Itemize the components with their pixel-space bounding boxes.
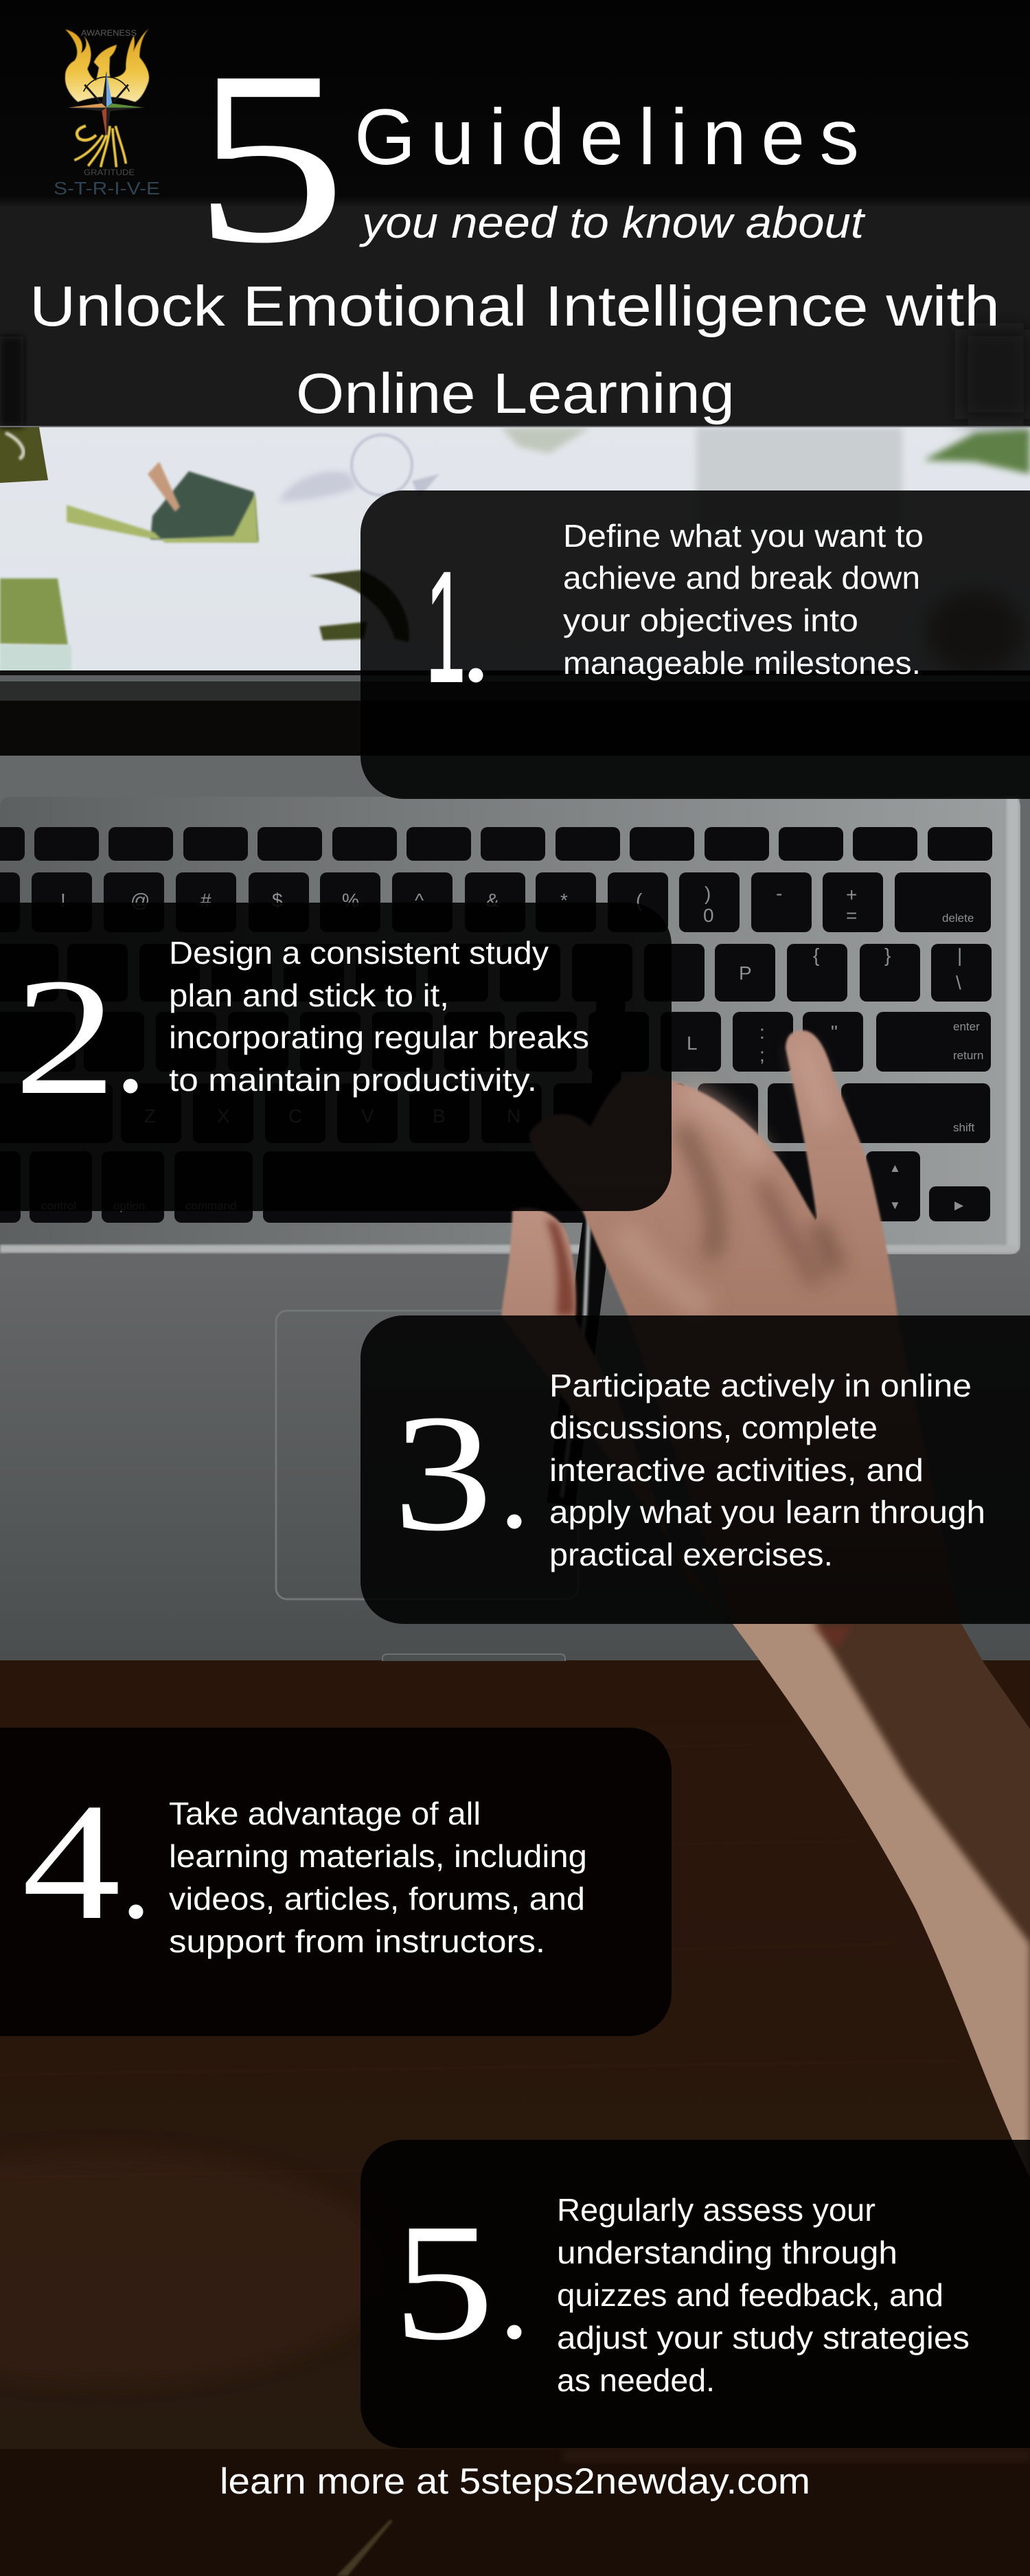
forearm: [721, 1614, 1030, 2184]
pen: [561, 997, 611, 1504]
text: step 1: achieve and break down: [563, 560, 920, 596]
keyboard legends: command: [185, 1199, 237, 1212]
text: step 5: [557, 2192, 970, 2398]
text: step 5: quizzes and feedback, and: [557, 2277, 943, 2313]
keyboard legends: !: [60, 890, 66, 911]
text: step 2: incorporating regular breaks: [169, 1019, 589, 1055]
icon: STRIVE phoenix logo: GRATITUDE: [84, 168, 135, 177]
keyboard legends: return: [953, 1049, 983, 1062]
keyboard legends: B: [433, 1105, 446, 1127]
text: step 3: practical exercises.: [549, 1537, 833, 1572]
number 5: 5: [393, 2189, 494, 2375]
panel: step 3: [360, 1315, 1030, 1624]
keyboard legends: X: [217, 1105, 230, 1127]
panel: step 4: [0, 1728, 672, 2036]
text: step 3: apply what you learn through: [549, 1494, 985, 1530]
keyboard legends: %: [342, 890, 359, 911]
text: step 3: [549, 1368, 985, 1572]
keyboard legends: ^: [415, 890, 424, 911]
number 4: [22, 1769, 143, 1954]
keyboard legends: {: [813, 945, 819, 966]
text: step 4: Take advantage of all: [169, 1796, 481, 1831]
text: step 5: as needed.: [557, 2362, 715, 2398]
phoenix tail: [74, 126, 126, 167]
text: step 2: plan and stick to it,: [169, 978, 449, 1013]
hand and fingers: [501, 1030, 961, 1624]
heading: Unlock Emotional Intelligence with: [30, 274, 1000, 338]
keyboard legends: ▶: [954, 1199, 964, 1212]
number 3: 3: [393, 1380, 493, 1566]
keyboard legends: L: [687, 1032, 698, 1054]
dial: [84, 77, 129, 91]
text: step 1: manageable milestones.: [563, 645, 921, 681]
number 2: [14, 944, 137, 1129]
text: step 5: Regularly assess your: [557, 2192, 876, 2228]
keyboard legends: ▼: [889, 1199, 901, 1212]
title: big numeral 5: 5: [193, 20, 347, 294]
laptop bezel and hinge: [0, 670, 1030, 826]
compass star: [67, 71, 146, 142]
number 1: 1: [426, 539, 466, 715]
keyboard legends: P: [739, 962, 752, 984]
keyboard legends: =: [846, 905, 857, 926]
panel: step 2: [0, 903, 672, 1211]
keyboard legends: option: [113, 1199, 145, 1212]
finger shading: [680, 1127, 838, 1285]
text: step 1: [563, 518, 924, 681]
text: step 5: adjust your study strategies: [557, 2320, 970, 2355]
keyboard legends: delete: [942, 912, 974, 925]
laptop keyboard deck: [0, 756, 1030, 1661]
keyboard legends: -: [776, 883, 782, 904]
header band: [0, 0, 1030, 427]
number 1: [426, 539, 483, 715]
panel: step 1: [360, 490, 1030, 799]
keyboard legends: shift: [953, 1121, 974, 1134]
text: step 3: discussions, complete: [549, 1410, 878, 1445]
desk surface: [0, 1654, 1030, 2576]
keyboard legends: ): [705, 883, 711, 904]
keyboard legends: (: [636, 890, 643, 911]
text: step 1: Define what you want to: [563, 518, 924, 554]
keyboard legends: 0: [703, 905, 714, 926]
number 2: 2: [14, 944, 117, 1129]
text: step 4: videos, articles, forums, and: [169, 1881, 585, 1917]
text: step 4: support from instructors.: [169, 1923, 545, 1959]
keyboard legends: ▲: [889, 1162, 901, 1175]
keyboard legends: |: [957, 945, 962, 966]
keyboard legends: ;: [759, 1044, 765, 1065]
text: step 4: learning materials, including: [169, 1838, 587, 1874]
keyboard legends: V: [361, 1105, 374, 1127]
keyboard legends: +: [846, 884, 857, 905]
icon: STRIVE phoenix logo: [54, 28, 160, 199]
laptop screen: [0, 412, 1030, 673]
keyboard legends: control: [41, 1199, 76, 1212]
text: step 3: interactive activities, and: [549, 1452, 924, 1488]
trackpad: [276, 1311, 578, 1599]
text: step 1: your objectives into: [563, 602, 858, 638]
keyboard legends: N: [507, 1105, 520, 1127]
keyboard keys: [0, 827, 992, 1223]
number 4: 4: [22, 1769, 121, 1954]
keyboard legends: :: [759, 1021, 765, 1043]
heading: [30, 274, 1000, 425]
keyboard legends: C: [288, 1105, 302, 1127]
keyboard legends: #: [201, 890, 211, 911]
heading: Online Learning: [296, 361, 735, 425]
text: step 2: Design a consistent study: [169, 935, 549, 971]
keyboard legends: }: [884, 945, 891, 966]
text: step 5: understanding through: [557, 2235, 897, 2270]
phoenix flames: [65, 29, 149, 102]
icon: STRIVE phoenix logo: AWARENESS: [81, 28, 137, 38]
keyboard legends: [41, 883, 983, 1212]
text: step 3: Participate actively in online: [549, 1368, 972, 1403]
keyboard legends: Z: [144, 1105, 156, 1127]
number 5: [393, 2189, 522, 2375]
text: step 2: [169, 935, 589, 1098]
keyboard legends: enter: [953, 1020, 980, 1033]
number 3: [393, 1380, 522, 1566]
keyboard legends: ": [831, 1021, 838, 1043]
keyboard legends: \: [956, 972, 961, 993]
keyboard legends: &: [486, 890, 499, 911]
panel: step 5: [360, 2140, 1030, 2448]
keyboard legends: *: [560, 890, 568, 911]
keyboard legends: $: [272, 890, 283, 911]
text: step 2: to maintain productivity.: [169, 1062, 537, 1098]
icon: STRIVE phoenix logo: S-T-R-I-V-E: [54, 178, 160, 199]
title: Guidelines: Guidelines: [354, 93, 859, 181]
footer: website link text: learn more at 5steps2newday.com: [220, 2461, 810, 2502]
keyboard legends: @: [130, 890, 150, 911]
subtitle: you need to know about: you need to know about: [359, 198, 865, 247]
text: step 4: [169, 1796, 587, 1959]
